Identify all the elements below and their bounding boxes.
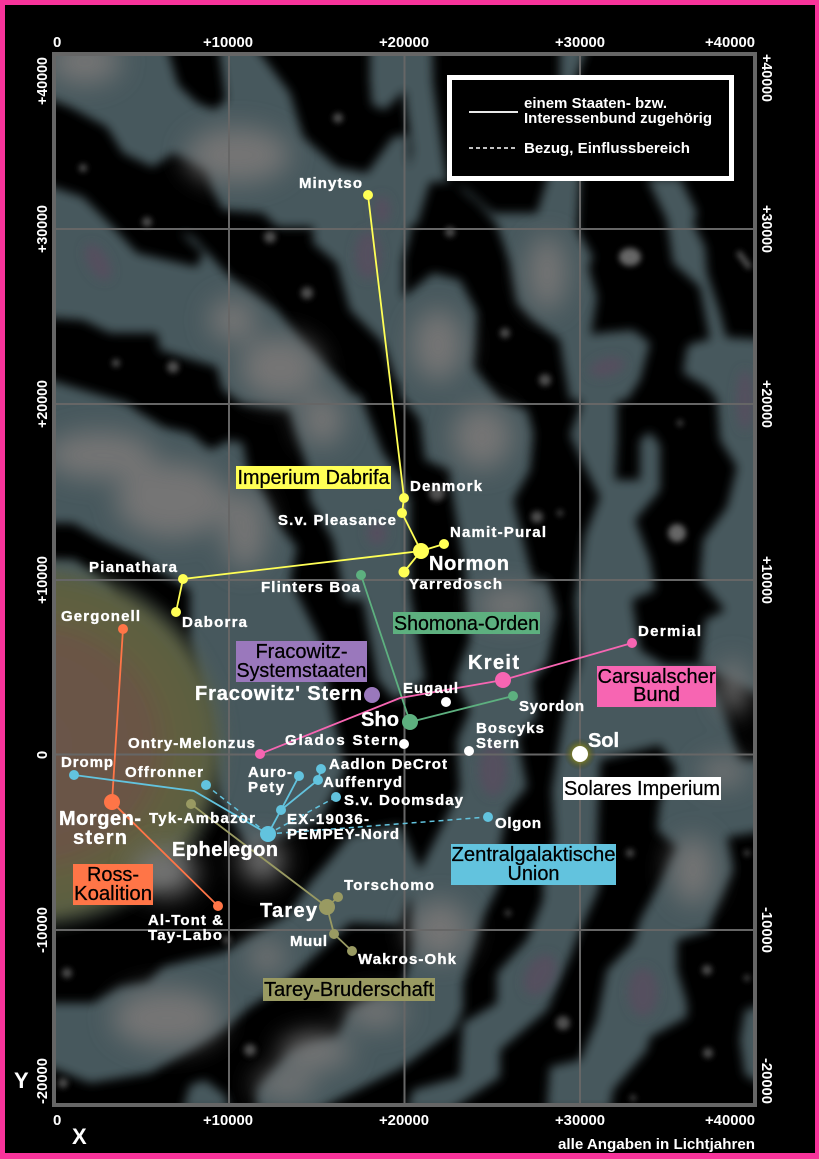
- link lines: Tarey-Bruderschaft: [191, 804, 352, 951]
- link lines: Ross-Koalition: [112, 629, 218, 906]
- Fracowitz-Systemstaaten label: [236, 641, 367, 682]
- left y axis labels: -20000: [34, 1058, 51, 1104]
- system: Eugaul: Eugaul: [403, 680, 458, 697]
- system: Olgon: [483, 812, 541, 832]
- grid lines: [54, 54, 755, 1105]
- system: S.v. Doomsday: S.v. Doomsday: [344, 792, 464, 809]
- link lines: Carsualscher Bund: [260, 643, 632, 754]
- system: Al-Tont & Tay-Labo: [148, 901, 223, 944]
- system: Auro-Pety: Pety: [248, 779, 285, 796]
- system: Ephelegon: [172, 826, 278, 861]
- system: Dromp: Dromp: [61, 754, 113, 771]
- axis letter Y: Y: [14, 1068, 29, 1093]
- top x axis labels: +40000: [705, 34, 755, 51]
- system: Gergonell: [61, 608, 140, 634]
- system: Ontry-Melonzus: Ontry-Melonzus: [128, 735, 255, 752]
- Fracowitz-Systemstaaten label: Systemstaaten: [236, 660, 366, 682]
- system: Normon: Normon: [429, 553, 509, 575]
- right y axis labels: -10000: [758, 907, 775, 953]
- system: Tarey: Tarey: [260, 900, 318, 922]
- right y axis labels: -20000: [758, 1058, 775, 1104]
- system: Syordon: [508, 691, 584, 715]
- system: Namit-Pural: [439, 524, 546, 549]
- system: Daborra: Daborra: [182, 614, 248, 631]
- nebula map: [56, 56, 753, 1103]
- system: Tyk-Ambazor: [149, 799, 255, 827]
- system: Normon: [413, 543, 509, 575]
- Carsualscher Bund label: Carsualscher: [598, 666, 716, 688]
- Tarey-Bruderschaft label: Tarey-Bruderschaft: [264, 979, 434, 1001]
- map frame: [54, 54, 755, 1105]
- left y axis labels: [34, 57, 51, 1104]
- system: Yarredosch: [398, 566, 502, 593]
- bottom x axis labels: +40000: [705, 1112, 755, 1129]
- system: Gergonell: Gergonell: [61, 608, 140, 625]
- right y axis labels: +20000: [758, 380, 775, 428]
- system: Boscyks Stern: Stern: [476, 735, 519, 752]
- system: Al-Tont & Tay-Labo: Tay-Labo: [148, 927, 222, 944]
- right y axis labels: +10000: [758, 556, 775, 604]
- system: Ontry-Melonzus: [128, 735, 265, 759]
- top x axis labels: +10000: [203, 34, 253, 51]
- system: Denmork: [399, 478, 483, 503]
- left y axis labels: +40000: [34, 57, 51, 105]
- system: Pianathara: Pianathara: [89, 559, 178, 576]
- system: Denmork: Denmork: [410, 478, 483, 495]
- bottom x axis labels: +30000: [555, 1112, 605, 1129]
- system: Olgon: Olgon: [495, 815, 541, 832]
- Zentralgalaktische Union label: Union: [508, 863, 560, 885]
- system: Eugaul: [403, 680, 458, 707]
- system: EX-19036-PEMPEY-Nord: EX-19036-: [287, 811, 369, 828]
- units note: alle Angaben in Lichtjahren: [558, 1136, 755, 1153]
- system: Torschomo: Torschomo: [344, 877, 434, 894]
- system: Kreit: Kreit: [468, 652, 519, 674]
- left y axis labels: 0: [34, 751, 51, 759]
- left y axis labels: -10000: [34, 907, 51, 953]
- system: Minytso: Minytso: [299, 175, 362, 192]
- system: Torschomo: [333, 877, 434, 902]
- Zentralgalaktische Union label: [451, 844, 616, 885]
- top x axis labels: [53, 34, 755, 51]
- link lines: Imperium Dabrifa: [176, 195, 444, 612]
- system: Dromp: [61, 754, 113, 780]
- axis letter X: X: [72, 1124, 87, 1149]
- system: Namit-Pural: Namit-Pural: [450, 524, 546, 541]
- system: Auro-Pety: [248, 764, 304, 796]
- Ross-Koalition label: Ross-: [87, 864, 139, 886]
- system: EX-19036-PEMPEY-Nord: [276, 805, 399, 843]
- system: Sho: Sho: [361, 709, 399, 731]
- system: Aadlon DeCrot: Aadlon DeCrot: [329, 756, 447, 773]
- system: Morgenstern: Morgen-: [59, 808, 141, 830]
- left y axis labels: +30000: [34, 205, 51, 253]
- bottom x axis labels: +20000: [379, 1112, 429, 1129]
- legend: [450, 78, 732, 178]
- system: Dermial: [627, 623, 701, 648]
- left y axis labels: +10000: [34, 556, 51, 604]
- system: Kreit: [468, 652, 519, 688]
- system: Muul: Muul: [290, 933, 327, 950]
- system: Tyk-Ambazor: Tyk-Ambazor: [149, 810, 255, 827]
- system: Muul: [290, 929, 339, 950]
- system: Wakros-Ohk: [347, 946, 457, 968]
- top x axis labels: 0: [53, 34, 61, 51]
- system: Boscyks Stern: [464, 720, 544, 756]
- system: Al-Tont & Tay-Labo: Al-Tont &: [148, 912, 223, 929]
- system: Ephelegon: Ephelegon: [172, 839, 278, 861]
- system: Boscyks Stern: Boscyks: [476, 720, 544, 737]
- system: S.v. Pleasance: S.v. Pleasance: [278, 512, 396, 529]
- system: Sol: [564, 730, 619, 770]
- bottom x axis labels: 0: [53, 1112, 61, 1129]
- system: Sho: [361, 709, 418, 731]
- system: Syordon: Syordon: [519, 698, 584, 715]
- link lines: Shomona-Orden: [361, 575, 513, 722]
- system: Auffenryd: Auffenryd: [323, 774, 402, 791]
- Solares Imperium label: Solares Imperium: [564, 778, 720, 800]
- legend: Interessenbund zugehörig: [524, 110, 712, 127]
- Imperium Dabrifa label: Imperium Dabrifa: [238, 467, 390, 489]
- system: Auro-Pety: Auro-: [248, 764, 292, 781]
- system: Daborra: [171, 607, 248, 631]
- system: Offronner: [125, 764, 211, 790]
- system: Dermial: Dermial: [638, 623, 701, 640]
- legend: Bezug, Einflussbereich: [524, 140, 690, 157]
- right y axis labels: +30000: [758, 205, 775, 253]
- Carsualscher Bund label: [597, 666, 716, 707]
- left y axis labels: +20000: [34, 380, 51, 428]
- system: Pianathara: [89, 559, 188, 584]
- system: Sol: Sol: [588, 730, 619, 752]
- right y axis labels: +40000: [758, 54, 775, 102]
- system: Glados Stern: Glados Stern: [285, 732, 398, 749]
- Ross core glow: [56, 559, 223, 934]
- system: Yarredosch: Yarredosch: [409, 576, 502, 593]
- system: Morgenstern: stern: [73, 827, 127, 849]
- system: Minytso: [299, 175, 373, 200]
- system: Offronner: Offronner: [125, 764, 203, 781]
- system: Morgenstern: [59, 794, 141, 849]
- system: Fracowitz' Stern: Fracowitz' Stern: [195, 683, 362, 705]
- system: Flinters Boa: [261, 570, 366, 596]
- Fracowitz-Systemstaaten label: Fracowitz-: [256, 641, 348, 663]
- top x axis labels: +30000: [555, 34, 605, 51]
- system: Wakros-Ohk: Wakros-Ohk: [358, 951, 457, 968]
- bottom x axis labels: [53, 1112, 755, 1129]
- right y axis labels: [758, 54, 775, 1104]
- Carsualscher Bund label: Bund: [633, 684, 680, 706]
- Zentralgalaktische Union label: Zentralgalaktische: [452, 844, 616, 866]
- Ross-Koalition label: [73, 864, 153, 905]
- system: Flinters Boa: Flinters Boa: [261, 579, 361, 596]
- legend: einem Staaten- bzw.: [524, 95, 667, 112]
- system: EX-19036-PEMPEY-Nord: PEMPEY-Nord: [287, 826, 399, 843]
- Ross-Koalition label: Koalition: [74, 883, 152, 905]
- dashed lines: Zentralgalaktische Union: [206, 785, 488, 834]
- top x axis labels: +20000: [379, 34, 429, 51]
- Shomona-Orden label: Shomona-Orden: [394, 613, 539, 635]
- link lines: Zentralgalaktische Union: [74, 769, 321, 834]
- bottom x axis labels: +10000: [203, 1112, 253, 1129]
